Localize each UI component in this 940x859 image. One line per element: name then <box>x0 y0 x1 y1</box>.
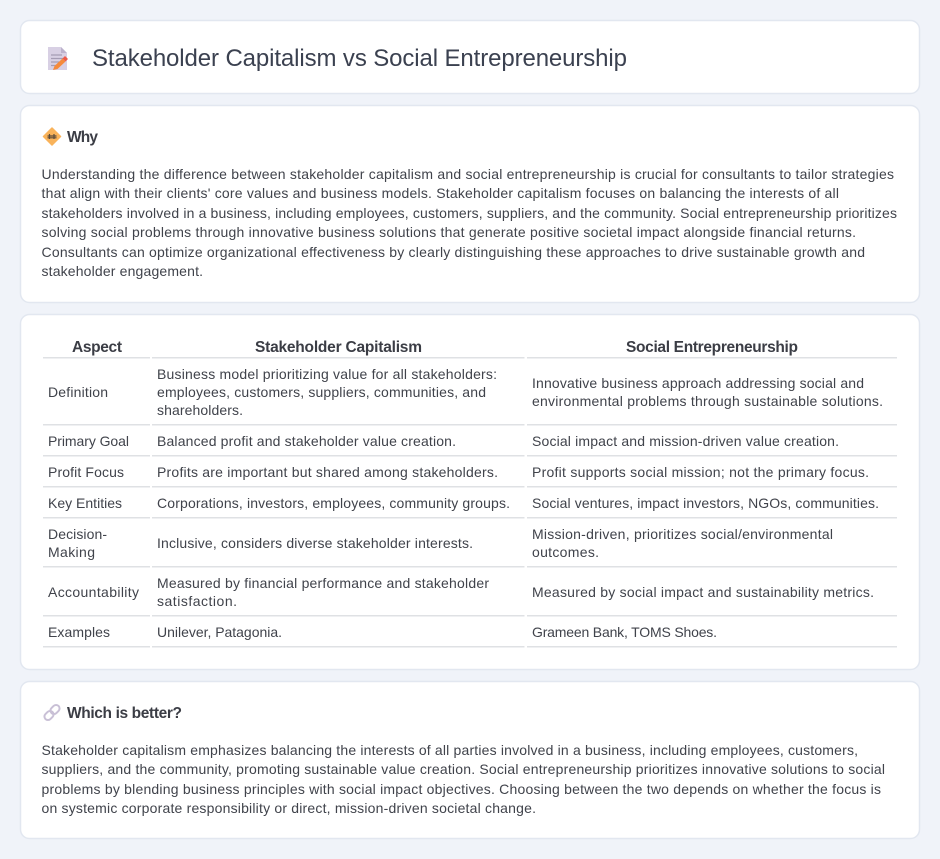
text block: which is better paragraph: suppliers, and the community, promoting sustainable value creation. Social entrepreneurship prioritizes innovative solutions to social <box>42 761 885 777</box>
table row: decision-making: Making <box>48 544 95 560</box>
text block: why paragraph: that align with their clients' core values and business models. Stakeholder capitalism focuses on balancing the interests of all <box>42 185 839 201</box>
table row: profit focus: Profits are important but shared among stakeholders. <box>157 464 498 480</box>
table row: accountability <box>43 575 897 616</box>
panel: comparison table <box>20 314 920 670</box>
text block: why paragraph: stakeholder engagement. <box>42 263 203 279</box>
table row: definition <box>43 366 897 426</box>
text block: why paragraph: Consultants can optimize organizational effectiveness by clearly distinguishing these approaches to drive sustainable growth and <box>42 244 865 260</box>
table header row: Social Entrepreneurship <box>626 339 798 356</box>
table row: primary goal: Balanced profit and stakeholder value creation. <box>157 433 456 449</box>
table row: definition: environmental problems through sustainable solutions. <box>532 393 883 409</box>
table row: profit focus: Profit supports social mission; not the primary focus. <box>532 464 869 480</box>
text block: which is better paragraph: problems by blending business principles with social impact objectives. Choosing between the two depends on whether the focus is <box>42 781 881 797</box>
table row: examples: Grameen Bank, TOMS Shoes. <box>532 624 717 640</box>
table row: accountability: Measured by social impact and sustainability metrics. <box>532 584 874 600</box>
table row: decision-making: Mission-driven, prioritizes social/environmental <box>532 526 833 542</box>
table row: key entities: Corporations, investors, employees, community groups. <box>157 495 510 511</box>
text block: why paragraph: stakeholders involved in a business, including employees, customers, suppliers, and the community. Social entrepreneurship prioritizes <box>42 205 897 221</box>
table row: definition: employees, customers, suppliers, communities, and <box>157 384 486 400</box>
table row: primary goal: Social impact and mission-driven value creation. <box>532 433 839 449</box>
text block: which is better paragraph <box>42 742 885 816</box>
table row: definition: Business model prioritizing value for all stakeholders: <box>157 366 497 382</box>
text block: which is better paragraph: Stakeholder capitalism emphasizes balancing the interests of all parties involved in a business, including employees, customers, <box>42 742 858 758</box>
text block: why paragraph <box>42 166 897 279</box>
table row: definition: shareholders. <box>157 402 243 418</box>
table row: profit focus <box>43 464 897 488</box>
table row: key entities: Social ventures, impact investors, NGOs, communities. <box>532 495 879 511</box>
table row: definition: Innovative business approach addressing social and <box>532 375 864 391</box>
table row: decision-making: outcomes. <box>532 544 599 560</box>
panel: which is better <box>20 682 920 838</box>
text block: why paragraph: Understanding the difference between stakeholder capitalism and social entrepreneurship is crucial for consultants to tailor strategies <box>42 166 894 182</box>
table header row: Stakeholder Capitalism <box>255 339 422 356</box>
icon: chain link <box>43 703 61 722</box>
table row: definition: Definition <box>48 384 108 400</box>
table row: decision-making: Decision- <box>48 526 107 542</box>
text block: which is better paragraph: on systemic corporate responsibility or direct, mission-driven societal change. <box>42 800 536 816</box>
table row: examples: Examples <box>48 624 110 640</box>
table row: key entities <box>43 495 897 518</box>
table row: decision-making: Inclusive, considers diverse stakeholder interests. <box>157 535 473 551</box>
panel: title header <box>20 20 920 94</box>
table row: primary goal: Primary Goal <box>48 433 129 449</box>
heading: why: Why <box>67 129 98 146</box>
heading: which is better: Which is better? <box>67 705 182 722</box>
table row: accountability: Accountability <box>48 584 139 600</box>
table header row: Aspect <box>72 339 122 356</box>
table row: decision-making <box>43 526 897 568</box>
icon: warning diamond <box>44 128 60 145</box>
table row: key entities: Key Entities <box>48 495 122 511</box>
table row: examples <box>43 624 897 648</box>
table row: profit focus: Profit Focus <box>48 464 124 480</box>
table row: accountability: Measured by financial performance and stakeholder <box>157 575 489 591</box>
table row: examples: Unilever, Patagonia. <box>157 624 282 640</box>
text block: why paragraph: solving social problems through innovative business solutions that generate positive societal impact alongside financial returns. <box>42 224 856 240</box>
table header row <box>43 339 897 358</box>
title: Stakeholder Capitalism vs Social Entrepreneurship <box>92 45 627 72</box>
panel: why <box>20 106 920 302</box>
table row: primary goal <box>43 433 897 456</box>
table row: accountability: satisfaction. <box>157 593 237 609</box>
icon: memo with pencil <box>48 47 68 70</box>
